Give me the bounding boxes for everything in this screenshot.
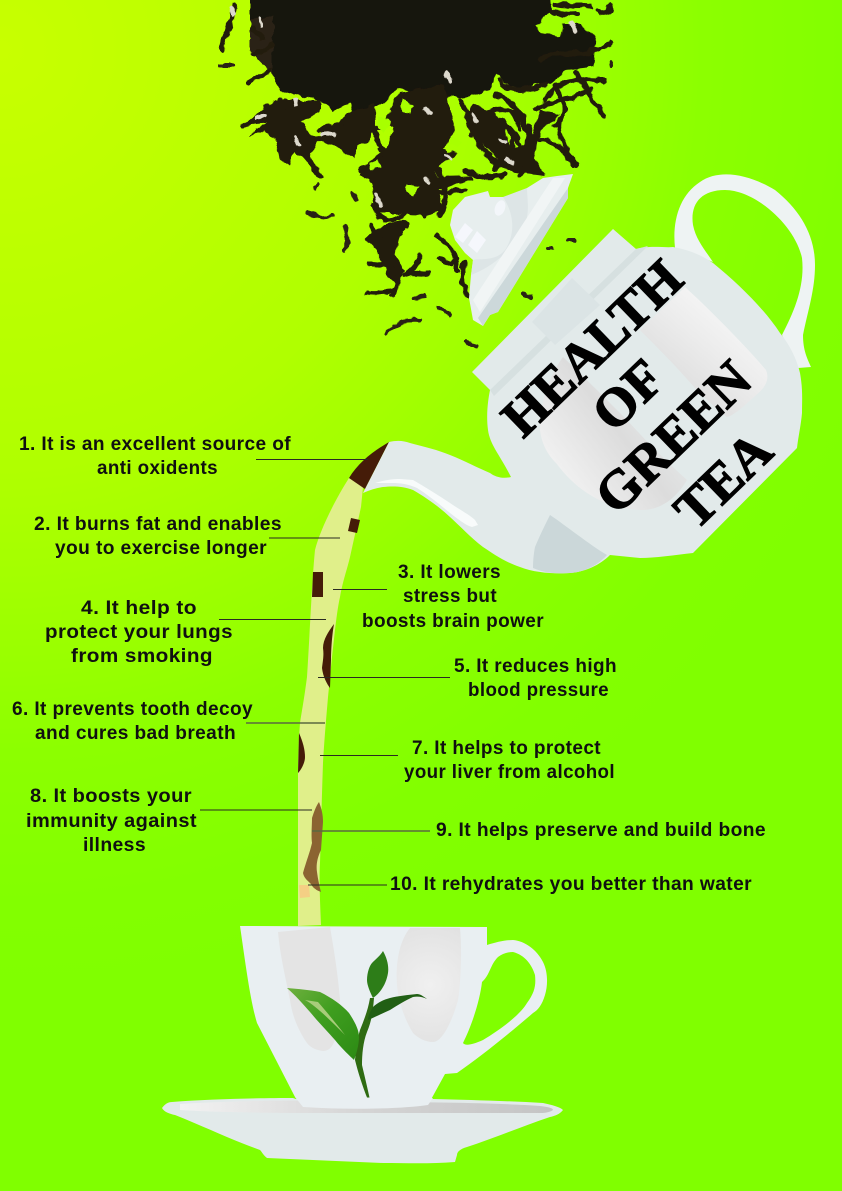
- benefit 3: 3. It lowers: [398, 561, 501, 583]
- benefit 1: 1. It is an excellent source of: [19, 433, 291, 455]
- lid knob highlights: [455, 223, 486, 253]
- teapot lid: [450, 174, 573, 326]
- benefit 1: [19, 433, 291, 479]
- saucer inner shadow: [180, 1101, 553, 1113]
- benefit 5: 5. It reduces high: [454, 655, 617, 677]
- tea colour patch: rectangle: [312, 572, 323, 597]
- spout highlight: [375, 479, 478, 527]
- benefit 6: and cures bad breath: [35, 722, 236, 744]
- title: HEALTH: [490, 248, 694, 448]
- benefit 4: 4. It help to: [81, 597, 197, 619]
- teapot handle: [674, 174, 815, 368]
- benefit 7: your liver from alcohol: [404, 761, 615, 783]
- cup shade left: [278, 927, 340, 1051]
- tea colour patch: peach: [299, 885, 310, 898]
- green tea sprig: [287, 951, 427, 1100]
- tea colour patch: long drop: [322, 624, 334, 688]
- benefit 2: 2. It burns fat and enables: [34, 513, 282, 535]
- title: TEA: [662, 420, 784, 540]
- lid knob spot: [493, 199, 507, 217]
- tea stream: [298, 442, 389, 926]
- benefit 8: 8. It boosts your: [30, 785, 192, 807]
- cup base over saucer: [295, 1097, 433, 1109]
- pot highlight panel upper: [640, 287, 767, 417]
- benefit 9: 9. It helps preserve and build bone: [436, 819, 766, 841]
- teacup: [240, 926, 547, 1109]
- benefit 3: boosts brain power: [362, 610, 544, 632]
- benefit 5: blood pressure: [468, 679, 609, 701]
- title: OF: [580, 347, 676, 443]
- benefit 7: 7. It helps to protect: [412, 737, 601, 759]
- benefit 4: [45, 597, 233, 667]
- tea colour patch: side drop: [298, 733, 305, 773]
- title: [490, 248, 784, 540]
- title: GREEN: [583, 349, 763, 525]
- pot lid band stripe: [490, 246, 648, 396]
- tea colour patch: light brown: [303, 802, 323, 892]
- lid rim shadow: [478, 188, 568, 326]
- benefit 10: 10. It rehydrates you better than water: [390, 873, 752, 895]
- saucer: [162, 1097, 563, 1163]
- benefit 5: [454, 655, 617, 701]
- benefit 2: you to exercise longer: [55, 537, 267, 559]
- benefit 7: [404, 737, 615, 783]
- teapot body and spout: [363, 229, 802, 573]
- benefit 8: immunity against: [26, 810, 197, 832]
- benefit 3: [362, 561, 544, 632]
- lid highlight band: [473, 178, 565, 312]
- tea colour patch: top: [349, 442, 389, 489]
- lid dome shade: [471, 188, 528, 275]
- pot highlight panel lower: [540, 357, 687, 510]
- falling tea leaves: [221, 0, 613, 345]
- benefit 8: [26, 785, 197, 856]
- benefit 6: [12, 698, 253, 744]
- benefit 6: 6. It prevents tooth decoy: [12, 698, 253, 720]
- spout shadow: [533, 515, 607, 573]
- tea colour patch: square: [348, 518, 360, 533]
- benefit 4: protect your lungs: [45, 621, 233, 643]
- leader lines: [200, 460, 450, 885]
- benefit 8: illness: [83, 834, 146, 856]
- cup shade right: [397, 928, 461, 1042]
- benefit 1: anti oxidents: [97, 457, 218, 479]
- benefit 2: [34, 513, 282, 559]
- pot shoulder patch: [532, 278, 600, 345]
- benefit 4: from smoking: [71, 645, 213, 667]
- benefit 3: stress but: [403, 585, 497, 607]
